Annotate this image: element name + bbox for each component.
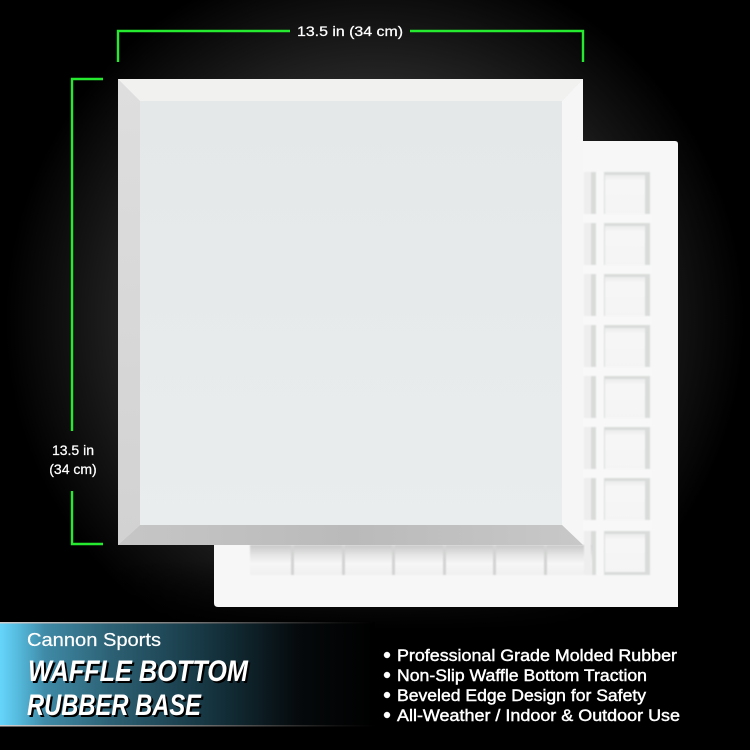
front panel: beveled top of base bbox=[118, 79, 583, 545]
recess base colour of right column bbox=[584, 172, 650, 575]
feature list: Beveled Edge Design for Safety bbox=[397, 686, 647, 705]
feature list: Non-Slip Waffle Bottom Traction bbox=[397, 666, 647, 685]
title banner bbox=[0, 622, 375, 726]
top bevel bbox=[118, 79, 583, 101]
flat face bbox=[140, 101, 562, 525]
bottom row cells bbox=[250, 545, 592, 575]
waffle grid: right column and bottom row bbox=[250, 172, 651, 575]
product title bbox=[27, 655, 251, 724]
back panel: waffle underside of base bbox=[214, 141, 678, 607]
height dimension bracket bbox=[49, 79, 103, 544]
bottom bevel bbox=[118, 525, 583, 545]
product title: RUBBER BASE bbox=[29, 691, 204, 724]
feature list: Professional Grade Molded Rubber bbox=[397, 646, 677, 665]
right bevel bbox=[562, 79, 583, 545]
brand name: Cannon Sports bbox=[27, 629, 161, 650]
width dimension bracket bbox=[118, 23, 583, 62]
height label: 13.5 in bbox=[52, 442, 94, 458]
feature list: All-Weather / Indoor & Outdoor Use bbox=[397, 706, 680, 725]
product title: RUBBER BASE bbox=[27, 689, 202, 722]
height label: (34 cm) bbox=[49, 461, 97, 477]
left bevel bbox=[118, 79, 140, 545]
product title: WAFFLE BOTTOM bbox=[30, 657, 251, 690]
left strip of right column bbox=[584, 172, 591, 575]
width label: 13.5 in (34 cm) bbox=[297, 23, 403, 39]
product title: WAFFLE BOTTOM bbox=[28, 655, 249, 688]
feature list bbox=[384, 646, 680, 725]
